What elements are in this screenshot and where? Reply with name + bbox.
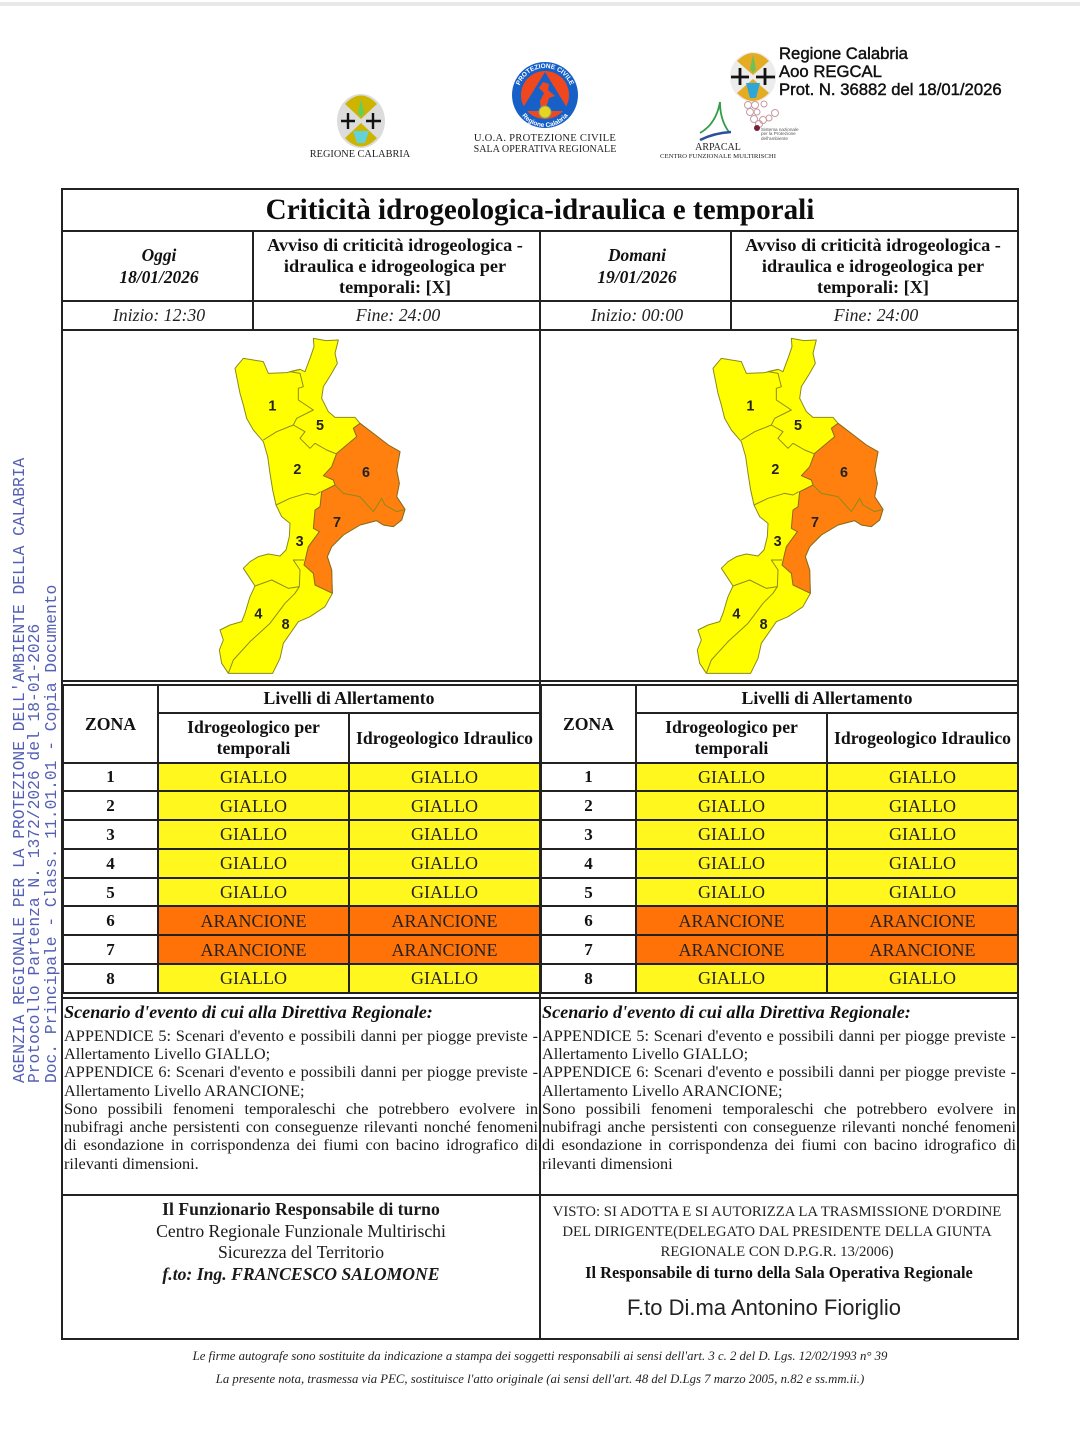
title: Criticità idrogeologica-idraulica e temporali <box>266 194 814 226</box>
map: Calabria zones tomorrow: 8 <box>760 617 768 633</box>
today date: 18/01/2026 <box>119 267 199 287</box>
today alert level table: GIALLO <box>220 767 287 787</box>
today end time: Fine: 24:00 <box>356 304 440 324</box>
tomorrow alert level table: GIALLO <box>889 968 956 988</box>
map: Calabria zones today: 1 <box>268 398 276 414</box>
tomorrow alert level table: 4 <box>584 854 593 873</box>
today scenario body: nubifragi anche persistenti con conseguenze rilevanti nonché fenomeni <box>64 1117 538 1136</box>
today alert level table: 7 <box>106 940 115 959</box>
today alert level table: GIALLO <box>220 824 287 844</box>
today alert level table: GIALLO <box>220 796 287 816</box>
today alert level table: GIALLO <box>411 796 478 816</box>
panel: responsible officer <box>156 1199 446 1284</box>
tomorrow alert level table: Idrogeologico per <box>665 717 798 737</box>
panel: authorization <box>552 1204 1001 1320</box>
tomorrow alert level table: Livelli di Allertamento <box>742 688 912 708</box>
logo: Regione Calabria: REGIONE CALABRIA <box>310 149 410 160</box>
logo: Protezione Civile: SALA OPERATIVA REGIONALE <box>474 144 616 155</box>
map: Calabria zones tomorrow: 1 <box>746 398 754 414</box>
tomorrow alert level table: GIALLO <box>698 796 765 816</box>
map: Calabria zones tomorrow: 2 <box>771 462 779 478</box>
today alert level table: ARANCIONE <box>392 940 498 960</box>
today warning heading: idraulica e idrogeologica per <box>284 256 506 276</box>
protocol stamp text: Aoo REGCAL <box>779 62 882 81</box>
map: Calabria zones today: 8 <box>282 617 290 633</box>
today scenario body: di esondazione in corrispondenza dei fiumi con bacino idrografico di <box>64 1134 538 1154</box>
tomorrow alert level table: GIALLO <box>698 824 765 844</box>
tomorrow scenario body: Sono possibili fenomeni temporaleschi che potrebbero evolvere in <box>542 1099 1016 1118</box>
authorization text: VISTO: SI ADOTTA E SI AUTORIZZA LA TRASMISSIONE D'ORDINE <box>553 1204 1001 1220</box>
tomorrow alert level table: 6 <box>584 911 593 930</box>
today scenario body: Allertamento Livello GIALLO; <box>64 1044 270 1063</box>
today alert level table: 4 <box>106 854 115 873</box>
today alert level table: 3 <box>106 825 115 844</box>
officer text lines: Sicurezza del Territorio <box>218 1242 384 1262</box>
logo: Protezione Civile: Regione Calabria <box>522 113 568 127</box>
tomorrow alert level table: 3 <box>584 825 593 844</box>
tomorrow alert level table: GIALLO <box>698 767 765 787</box>
today alert level table: GIALLO <box>220 853 287 873</box>
tomorrow alert level table: ZONA <box>563 714 614 734</box>
tomorrow alert level table: GIALLO <box>889 853 956 873</box>
today scenario body <box>64 1026 538 1172</box>
today warning heading: temporali: [X] <box>339 277 451 297</box>
tomorrow scenario heading: Scenario d'evento di cui alla Direttiva Regionale: <box>542 1002 911 1022</box>
tomorrow alert level table: GIALLO <box>889 796 956 816</box>
tomorrow date: Domani <box>608 245 666 265</box>
logo: ARPACAL: ARPACAL <box>695 142 741 153</box>
protocol stamp text <box>778 44 1002 99</box>
tomorrow alert level table: 5 <box>584 883 593 902</box>
footnote: PEC note: La presente nota, trasmessa via PEC, sostituisce l'atto originale (ai sensi dell'art. 48 del D.Lgs 7 marzo 2005, n.82 e ss.mm.ii.) <box>216 1372 864 1386</box>
tomorrow alert level table: GIALLO <box>889 824 956 844</box>
today alert level table: ZONA <box>85 714 136 734</box>
logo: ARPACAL: dell'ambiente <box>761 136 788 141</box>
panel: today header <box>63 232 539 331</box>
today alert level table: GIALLO <box>411 824 478 844</box>
tomorrow end time: Fine: 24:00 <box>834 304 918 324</box>
tomorrow warning heading: temporali: [X] <box>817 277 929 297</box>
map: Calabria zones tomorrow: 6 <box>840 465 848 481</box>
tomorrow scenario body: Allertamento Livello ARANCIONE; <box>542 1081 783 1100</box>
protocol stamp text: Prot. N. 36882 del 18/01/2026 <box>779 80 1002 99</box>
today alert level table: GIALLO <box>220 882 287 902</box>
tomorrow date <box>597 245 677 287</box>
today alert level table: 8 <box>106 969 115 988</box>
tomorrow scenario body: di esondazione in corrispondenza dei fiumi con bacino idrografico di <box>542 1134 1016 1154</box>
today scenario body: APPENDICE 6: Scenari d'evento e possibili danni per piogge previste - <box>64 1062 538 1081</box>
today alert level table: GIALLO <box>411 853 478 873</box>
tomorrow alert level table: GIALLO <box>698 853 765 873</box>
today alert level table: GIALLO <box>411 882 478 902</box>
tomorrow alert level table: GIALLO <box>698 882 765 902</box>
tomorrow warning heading <box>745 235 1001 297</box>
top grey band <box>0 2 1080 6</box>
officer text lines: Il Funzionario Responsabile di turno <box>162 1199 440 1219</box>
tomorrow start time: Inizio: 00:00 <box>591 304 683 324</box>
today alert level table: ARANCIONE <box>200 940 306 960</box>
today scenario body: rilevanti dimensioni. <box>64 1154 199 1172</box>
tomorrow alert level table: 7 <box>584 940 593 959</box>
logo: Regione Calabria protocol emblem <box>730 52 776 102</box>
today alert level table: 5 <box>106 883 115 902</box>
map: Calabria zones today: 7 <box>333 515 341 531</box>
panel: today alert table and scenario <box>63 684 539 1172</box>
tomorrow alert level table: Idrogeologico Idraulico <box>834 728 1011 748</box>
map: Calabria zones tomorrow: 5 <box>794 418 802 434</box>
today scenario body: Sono possibili fenomeni temporaleschi che potrebbero evolvere in <box>64 1099 538 1118</box>
officer text lines: f.to: Ing. FRANCESCO SALOMONE <box>162 1264 440 1284</box>
today start time: Inizio: 12:30 <box>113 304 205 324</box>
panel: tomorrow alert table and scenario <box>541 684 1017 1172</box>
authorization text: DEL DIRIGENTE(DELEGATO DAL PRESIDENTE DELLA GIUNTA <box>562 1224 992 1240</box>
tomorrow scenario body <box>542 1026 1016 1172</box>
today warning heading: Avviso di criticità idrogeologica - <box>267 235 523 255</box>
tomorrow alert level table: ARANCIONE <box>870 911 976 931</box>
logo: ARPACAL: Sistema nazionale <box>761 127 799 132</box>
authorization text: REGIONALE CON D.P.G.R. 13/2006) <box>660 1244 894 1260</box>
tomorrow alert level table <box>540 684 1018 994</box>
logo: ARPACAL <box>660 100 799 160</box>
today scenario body: APPENDICE 5: Scenari d'evento e possibili danni per piogge previste - <box>64 1026 538 1045</box>
operations room heading: Il Responsabile di turno della Sala Operativa Regionale <box>585 1263 973 1282</box>
tomorrow alert level table: GIALLO <box>889 882 956 902</box>
authorization text <box>552 1204 1001 1260</box>
main frame <box>61 188 1019 1340</box>
map: Calabria zones today: 4 <box>254 606 262 622</box>
tomorrow alert level table: ARANCIONE <box>870 940 976 960</box>
side stamp: agency line: AGENZIA REGIONALE PER LA PROTEZIONE DELL'AMBIENTE DELLA CALABRIA <box>10 458 29 1083</box>
map: Calabria zones today: 6 <box>362 465 370 481</box>
today alert level table: Idrogeologico Idraulico <box>356 728 533 748</box>
tomorrow alert level table: 1 <box>584 767 593 786</box>
footnote: signatures: Le firme autografe sono sostituite da indicazione a stampa dei soggetti responsabili ai sensi dell'art. 3 c. 2 del D. Lgs. 12/02/1993 n° 39 <box>193 1348 887 1362</box>
tomorrow warning heading: Avviso di criticità idrogeologica - <box>745 235 1001 255</box>
tomorrow alert level table: ARANCIONE <box>678 911 784 931</box>
today alert level table: Idrogeologico per <box>187 717 320 737</box>
map: Calabria zones tomorrow <box>696 338 884 674</box>
map: Calabria zones tomorrow: 7 <box>811 515 819 531</box>
logo: ARPACAL: CENTRO FUNZIONALE MULTIRISCHI <box>660 152 776 160</box>
tomorrow scenario body: Allertamento Livello GIALLO; <box>542 1044 748 1063</box>
today date <box>119 245 199 287</box>
tomorrow alert level table: GIALLO <box>889 767 956 787</box>
today alert level table: Livelli di Allertamento <box>264 688 434 708</box>
signature: F.to Di.ma Antonino Fioriglio <box>627 1295 901 1320</box>
today alert level table: 2 <box>106 796 115 815</box>
logo: ARPACAL: per la Protezione <box>761 131 796 136</box>
tomorrow alert level table: 8 <box>584 969 593 988</box>
today scenario heading: Scenario d'evento di cui alla Direttiva Regionale: <box>64 1002 433 1022</box>
tomorrow alert level table: ARANCIONE <box>678 940 784 960</box>
tomorrow scenario body: rilevanti dimensioni <box>542 1154 673 1172</box>
tomorrow alert level table: temporali <box>695 738 768 758</box>
tomorrow warning heading: idraulica e idrogeologica per <box>762 256 984 276</box>
side stamp: protocol line: Protocollo Partenza N. 1372/2026 del 18-01-2026 <box>25 624 44 1083</box>
map: Calabria zones today <box>218 338 406 674</box>
logo: Protezione Civile <box>474 62 616 155</box>
officer text lines <box>156 1199 446 1284</box>
today alert level table: GIALLO <box>411 968 478 988</box>
tomorrow scenario text <box>542 1002 1016 1172</box>
tomorrow scenario body: APPENDICE 6: Scenari d'evento e possibili danni per piogge previste - <box>542 1062 1016 1081</box>
protocol stamp text: Regione Calabria <box>779 44 908 63</box>
today alert level table: ARANCIONE <box>200 911 306 931</box>
side stamp: document line: Doc. Principale - Class. 11.01.01 - Copia Documento <box>42 585 61 1083</box>
logo: Protezione Civile: U.O.A. PROTEZIONE CIVILE <box>474 132 616 144</box>
today warning heading <box>267 235 523 297</box>
today alert level table: temporali <box>217 738 290 758</box>
map: Calabria zones tomorrow: 4 <box>732 606 740 622</box>
tomorrow scenario body: APPENDICE 5: Scenari d'evento e possibili danni per piogge previste - <box>542 1026 1016 1045</box>
map: Calabria zones today: 5 <box>316 418 324 434</box>
today scenario body: Allertamento Livello ARANCIONE; <box>64 1081 305 1100</box>
today alert level table: 1 <box>106 767 115 786</box>
today alert level table: GIALLO <box>411 767 478 787</box>
today date: Oggi <box>142 245 176 265</box>
today alert level table: GIALLO <box>220 968 287 988</box>
today alert level table: 6 <box>106 911 115 930</box>
tomorrow alert level table: GIALLO <box>698 968 765 988</box>
map: Calabria zones today: 3 <box>296 534 304 550</box>
map: Calabria zones tomorrow: 3 <box>774 534 782 550</box>
logo: Regione Calabria <box>310 94 410 160</box>
tomorrow scenario body: nubifragi anche persistenti con conseguenze rilevanti nonché fenomeni <box>542 1117 1016 1136</box>
tomorrow alert level table: 2 <box>584 796 593 815</box>
logo: Protezione Civile: PROTEZIONE CIVILE <box>516 64 574 86</box>
today alert level table: ARANCIONE <box>392 911 498 931</box>
today alert level table <box>62 684 540 994</box>
tomorrow date: 19/01/2026 <box>597 267 677 287</box>
officer text lines: Centro Regionale Funzionale Multirischi <box>156 1220 446 1240</box>
map: Calabria zones today: 2 <box>293 462 301 478</box>
today scenario text <box>64 1002 538 1172</box>
panel: tomorrow header <box>541 232 1017 331</box>
